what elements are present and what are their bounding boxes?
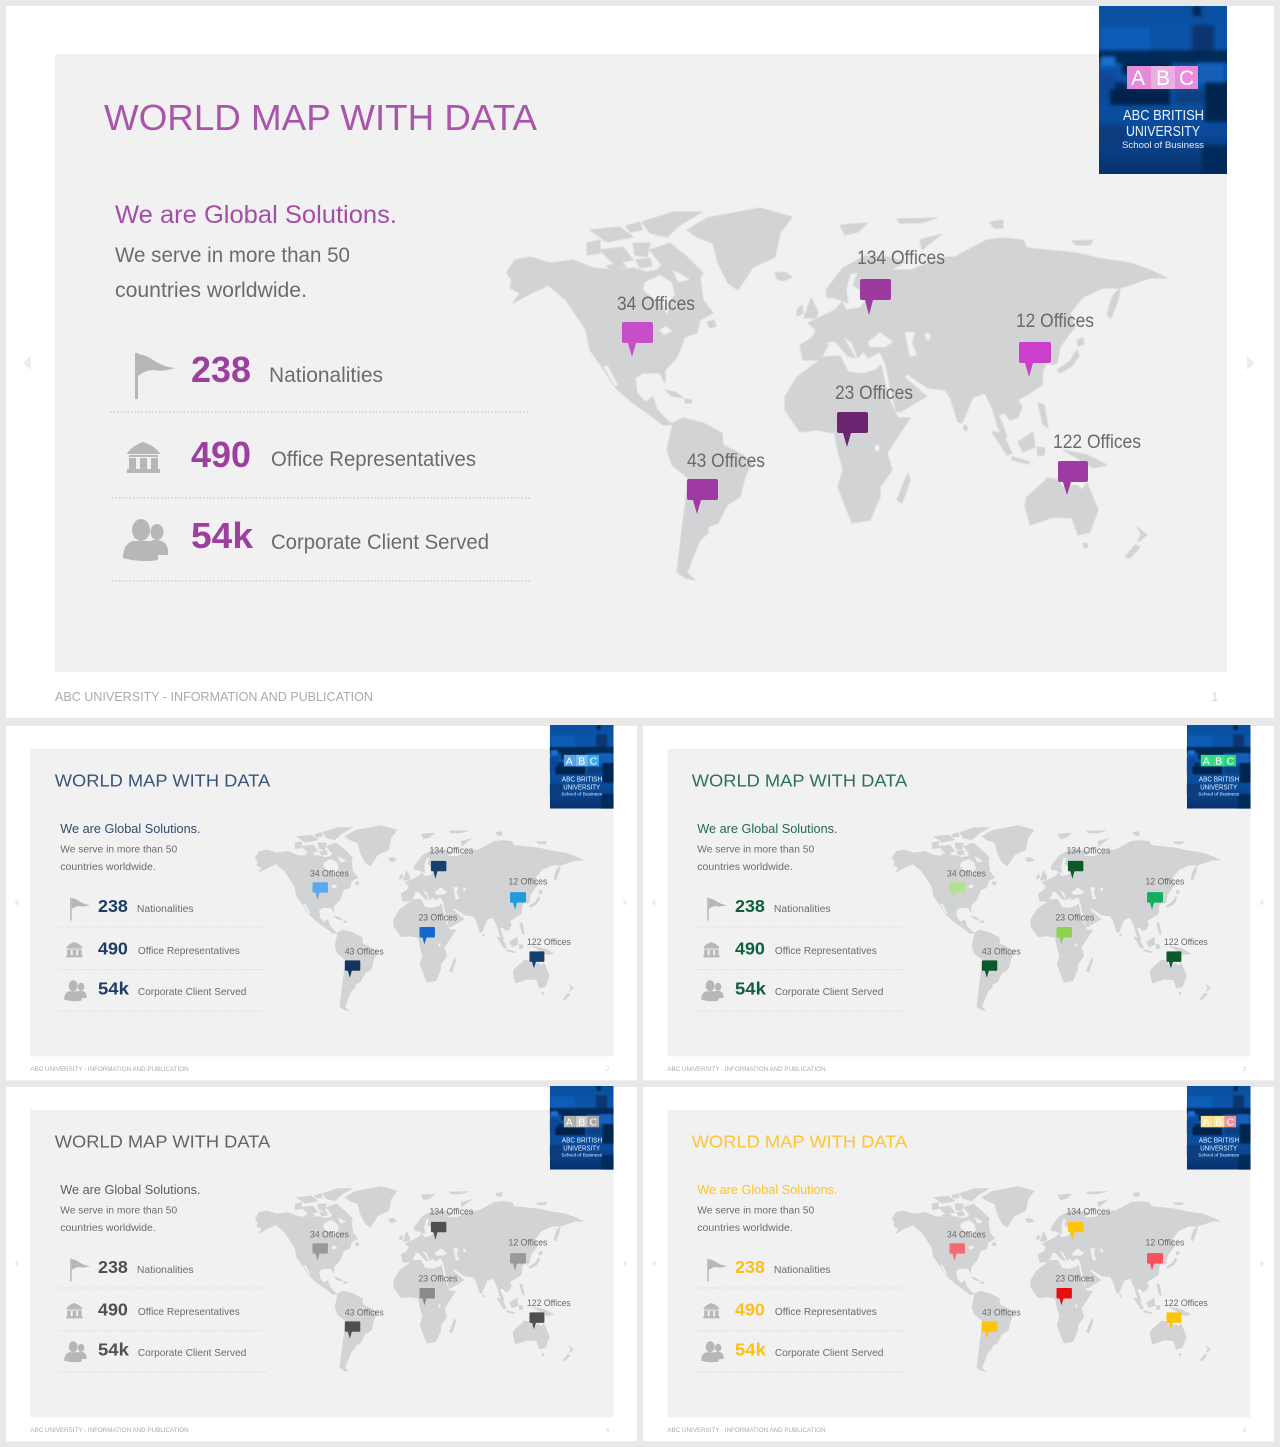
logo badge: B <box>1156 67 1170 90</box>
icon: people <box>123 519 168 561</box>
slide frame <box>643 726 1274 1080</box>
intro text <box>697 844 814 873</box>
stat: office representatives <box>98 938 240 958</box>
icon: flag <box>135 353 175 399</box>
page number: 3 <box>1243 1066 1247 1073</box>
logo badge: C <box>1179 67 1194 90</box>
map pin: 43 offices: 43 Offices <box>982 946 1021 957</box>
stat: office representatives <box>735 1299 877 1319</box>
map pin: 34 offices <box>947 1229 986 1261</box>
map pin: 134 offices <box>429 845 473 879</box>
stat: corporate clients <box>735 1340 884 1360</box>
map pin: 12 offices <box>1146 1238 1185 1271</box>
logo badge <box>1185 1086 1253 1171</box>
subheading: We are Global Solutions. <box>115 201 397 229</box>
map pin: 122 offices <box>527 937 571 968</box>
title: WORLD MAP WITH DATA <box>692 771 907 791</box>
map pin: 23 offices <box>835 383 913 447</box>
stat: nationalities: Nationalities <box>774 1265 831 1276</box>
logo badge: UNIVERSITY <box>563 1144 600 1153</box>
intro text <box>60 844 177 873</box>
stat: nationalities: Nationalities <box>774 904 831 915</box>
icon: temple <box>703 942 720 957</box>
icon: people <box>64 1341 87 1362</box>
stat: office representatives: 490 <box>735 1299 765 1319</box>
stat: nationalities: Nationalities <box>137 904 194 915</box>
map pin: 34 offices: 34 Offices <box>947 868 986 879</box>
stat: nationalities <box>98 896 194 916</box>
logo badge: C <box>1227 756 1235 767</box>
slide frame <box>643 1087 1274 1441</box>
subheading: We are Global Solutions. <box>60 822 201 836</box>
map pin: 34 offices <box>947 868 986 900</box>
logo badge: ABC BRITISH <box>562 1136 602 1145</box>
intro text: countries worldwide. <box>697 1223 793 1234</box>
map pin: 43 offices <box>982 946 1021 978</box>
page number: 2 <box>606 1066 610 1073</box>
map pin: 12 offices: 12 Offices <box>509 1238 548 1249</box>
map pin: 134 offices: 134 Offices <box>857 248 945 269</box>
stat: office representatives: 490 <box>191 434 251 475</box>
stat: office representatives: Office Representatives <box>138 946 240 957</box>
map pin: 12 offices <box>509 1238 548 1271</box>
icon: temple <box>127 442 160 473</box>
content panel <box>55 54 1227 672</box>
stat: office representatives <box>735 938 877 958</box>
logo badge: A <box>1203 1117 1210 1128</box>
stat: corporate clients: Corporate Client Served <box>775 1348 884 1359</box>
title: WORLD MAP WITH DATA <box>55 1132 270 1152</box>
stat: office representatives: 490 <box>735 938 765 958</box>
logo badge: ABC BRITISH <box>1123 108 1204 124</box>
map pin: 43 offices <box>345 1307 384 1339</box>
world map <box>507 208 1167 580</box>
arrow: next <box>624 899 627 906</box>
intro text: We serve in more than 50 <box>697 1205 814 1216</box>
logo badge: B <box>1215 756 1222 767</box>
icon: people <box>701 1341 724 1362</box>
map pin: 122 offices: 122 Offices <box>527 937 571 948</box>
map pin: 12 offices: 12 Offices <box>1146 877 1185 888</box>
map pin: 134 offices: 134 Offices <box>429 1206 473 1217</box>
arrow: previous <box>651 1260 655 1267</box>
map pin: 122 offices: 122 Offices <box>1164 1298 1208 1309</box>
map pin: 23 offices: 23 Offices <box>418 913 458 924</box>
logo badge: A <box>1203 756 1210 767</box>
stat: corporate clients: Corporate Client Served <box>775 987 884 998</box>
logo badge: UNIVERSITY <box>563 783 600 792</box>
logo badge: B <box>578 756 585 767</box>
map pin: 23 offices <box>418 1274 458 1305</box>
map pin: 134 offices <box>857 248 945 315</box>
stat: nationalities <box>98 1257 194 1277</box>
arrow: previous <box>651 899 655 906</box>
logo badge <box>1185 725 1253 810</box>
stat: nationalities <box>735 1257 831 1277</box>
footer text: ABC UNIVERSITY - INFORMATION AND PUBLICATION <box>667 1427 826 1434</box>
stat: corporate clients: 54k <box>98 1340 129 1360</box>
logo badge: School of Business <box>1198 1153 1240 1158</box>
slide frame <box>6 6 1274 718</box>
logo badge <box>548 1086 616 1171</box>
stat: corporate clients: 54k <box>98 979 129 999</box>
logo badge: C <box>590 1117 598 1128</box>
intro text: countries worldwide. <box>60 1223 156 1234</box>
map pin: 12 offices <box>1016 311 1094 377</box>
subheading: We are Global Solutions. <box>60 1183 201 1197</box>
logo badge: ABC BRITISH <box>1199 1136 1239 1145</box>
icon: temple <box>703 1303 720 1318</box>
map pin: 12 offices: 12 Offices <box>509 877 548 888</box>
intro text: We serve in more than 50 <box>60 844 177 855</box>
logo badge: UNIVERSITY <box>1200 783 1237 792</box>
map pin: 23 offices: 23 Offices <box>418 1274 458 1285</box>
map pin: 122 offices <box>1164 1298 1208 1329</box>
map pin: 12 offices: 12 Offices <box>1146 1238 1185 1249</box>
arrow: previous <box>23 356 31 370</box>
stat: corporate clients: Corporate Client Served <box>138 987 247 998</box>
stat: office representatives: Office Representatives <box>138 1307 240 1318</box>
slide 4: gray small slide <box>6 1086 637 1441</box>
map pin: 23 offices <box>418 913 458 944</box>
arrow: next <box>624 1260 627 1267</box>
logo badge: C <box>590 756 598 767</box>
arrow: next <box>1261 1260 1264 1267</box>
slide 2: blue small slide <box>6 725 637 1080</box>
world map <box>892 826 1221 1011</box>
logo badge: UNIVERSITY <box>1126 124 1200 140</box>
arrow: next <box>1247 356 1255 370</box>
stat: nationalities: 238 <box>735 896 765 916</box>
stat: nationalities: 238 <box>191 349 251 390</box>
logo badge: A <box>566 756 573 767</box>
map pin: 34 offices: 34 Offices <box>310 868 349 879</box>
map pin: 134 offices <box>429 1206 473 1240</box>
map pin: 23 offices: 23 Offices <box>1055 1274 1095 1285</box>
stat: office representatives: Office Representatives <box>271 448 476 471</box>
intro text: countries worldwide. <box>115 279 307 302</box>
map pin: 43 offices <box>345 946 384 978</box>
intro text <box>697 1205 814 1234</box>
map pin: 122 offices: 122 Offices <box>527 1298 571 1309</box>
icon: flag <box>707 1259 727 1282</box>
page number: 5 <box>1243 1427 1247 1434</box>
map pin: 43 offices: 43 Offices <box>982 1307 1021 1318</box>
arrow: previous <box>14 899 18 906</box>
logo badge <box>548 725 616 810</box>
stat: office representatives: Office Representatives <box>775 1307 877 1318</box>
map pin: 23 offices <box>1055 913 1095 944</box>
intro text: We serve in more than 50 <box>697 844 814 855</box>
icon: people <box>64 980 87 1001</box>
content panel <box>30 749 614 1056</box>
stat: corporate clients <box>735 979 884 999</box>
footer text: ABC UNIVERSITY - INFORMATION AND PUBLICATION <box>30 1427 189 1434</box>
stat: nationalities <box>735 896 831 916</box>
stat: office representatives: 490 <box>98 938 128 958</box>
title: WORLD MAP WITH DATA <box>104 97 537 138</box>
map pin: 122 offices <box>1053 432 1141 495</box>
arrow: next <box>1261 899 1264 906</box>
logo badge: UNIVERSITY <box>1200 1144 1237 1153</box>
stat: nationalities: Nationalities <box>137 1265 194 1276</box>
stat: nationalities: 238 <box>735 1257 765 1277</box>
map pin: 43 offices: 43 Offices <box>345 1307 384 1318</box>
content panel <box>667 1110 1251 1417</box>
icon: temple <box>66 1303 83 1318</box>
map pin: 43 offices <box>982 1307 1021 1339</box>
title: WORLD MAP WITH DATA <box>692 1132 907 1152</box>
stat: corporate clients <box>191 515 489 556</box>
map pin: 34 offices <box>310 868 349 900</box>
intro text <box>115 244 350 302</box>
stat: corporate clients <box>98 979 247 999</box>
logo badge: A <box>1131 67 1145 90</box>
logo badge: A <box>566 1117 573 1128</box>
subheading: We are Global Solutions. <box>697 822 838 836</box>
stat: nationalities: 238 <box>98 896 128 916</box>
map pin: 23 offices: 23 Offices <box>1055 913 1095 924</box>
map pin: 122 offices <box>527 1298 571 1329</box>
footer text: ABC UNIVERSITY - INFORMATION AND PUBLICATION <box>55 689 373 704</box>
map pin: 34 offices: 34 Offices <box>310 1229 349 1240</box>
world map <box>255 826 584 1011</box>
map pin: 23 offices <box>1055 1274 1095 1305</box>
map pin: 12 offices: 12 Offices <box>1016 311 1094 332</box>
map pin: 34 offices: 34 Offices <box>617 294 695 315</box>
slide 3: green small slide <box>643 725 1274 1080</box>
footer text: ABC UNIVERSITY - INFORMATION AND PUBLICATION <box>667 1066 826 1073</box>
map pin: 23 offices: 23 Offices <box>835 383 913 404</box>
footer text: ABC UNIVERSITY - INFORMATION AND PUBLICATION <box>30 1066 189 1073</box>
subheading: We are Global Solutions. <box>697 1183 838 1197</box>
map pin: 134 offices: 134 Offices <box>1066 845 1110 856</box>
content panel <box>30 1110 614 1417</box>
stat: office representatives: Office Representatives <box>775 946 877 957</box>
map pin: 134 offices <box>1066 1206 1110 1240</box>
stat: corporate clients: 54k <box>191 515 254 556</box>
logo badge: School of Business <box>561 792 603 797</box>
map pin: 134 offices: 134 Offices <box>429 845 473 856</box>
stat: nationalities: 238 <box>98 1257 128 1277</box>
stat: office representatives <box>191 434 476 475</box>
map pin: 34 offices <box>617 294 695 357</box>
intro text: countries worldwide. <box>697 862 793 873</box>
map pin: 122 offices <box>1164 937 1208 968</box>
icon: flag <box>70 898 90 921</box>
stat: corporate clients: 54k <box>735 1340 766 1360</box>
stat: office representatives <box>98 1299 240 1319</box>
world map <box>892 1187 1221 1372</box>
stat: nationalities: Nationalities <box>269 364 383 387</box>
logo badge: School of Business <box>1122 140 1205 150</box>
map pin: 34 offices: 34 Offices <box>947 1229 986 1240</box>
map pin: 122 offices: 122 Offices <box>1164 937 1208 948</box>
stat: corporate clients: Corporate Client Served <box>138 1348 247 1359</box>
logo badge: C <box>1227 1117 1235 1128</box>
stat: corporate clients: 54k <box>735 979 766 999</box>
logo badge: School of Business <box>1198 792 1240 797</box>
logo badge: B <box>578 1117 585 1128</box>
stat: office representatives: 490 <box>98 1299 128 1319</box>
arrow: previous <box>14 1260 18 1267</box>
stat: corporate clients: Corporate Client Served <box>271 531 489 554</box>
map pin: 134 offices <box>1066 845 1110 879</box>
map pin: 134 offices: 134 Offices <box>1066 1206 1110 1217</box>
stat: nationalities <box>191 349 383 390</box>
icon: flag <box>70 1259 90 1282</box>
page number: 1 <box>1211 689 1218 704</box>
intro text <box>60 1205 177 1234</box>
slide 1: purple large slide <box>6 6 1274 718</box>
logo badge: B <box>1215 1117 1222 1128</box>
icon: flag <box>707 898 727 921</box>
intro text: We serve in more than 50 <box>115 244 350 267</box>
map pin: 34 offices <box>310 1229 349 1261</box>
slide frame <box>6 1087 637 1441</box>
icon: temple <box>66 942 83 957</box>
map pin: 43 offices: 43 Offices <box>687 451 765 472</box>
page number: 4 <box>606 1427 610 1434</box>
content panel <box>667 749 1251 1056</box>
logo badge: ABC BRITISH <box>1199 775 1239 784</box>
intro text: We serve in more than 50 <box>60 1205 177 1216</box>
map pin: 43 offices: 43 Offices <box>345 946 384 957</box>
intro text: countries worldwide. <box>60 862 156 873</box>
map pin: 12 offices <box>1146 877 1185 910</box>
map pin: 122 offices: 122 Offices <box>1053 432 1141 453</box>
stat: corporate clients <box>98 1340 247 1360</box>
logo badge: ABC BRITISH <box>562 775 602 784</box>
slide frame <box>6 726 637 1080</box>
map pin: 43 offices <box>687 451 765 514</box>
logo badge: School of Business <box>561 1153 603 1158</box>
title: WORLD MAP WITH DATA <box>55 771 270 791</box>
slide 5: yellow small slide <box>643 1086 1274 1441</box>
icon: people <box>701 980 724 1001</box>
map pin: 12 offices <box>509 877 548 910</box>
world map <box>255 1187 584 1372</box>
logo badge <box>1095 6 1231 177</box>
